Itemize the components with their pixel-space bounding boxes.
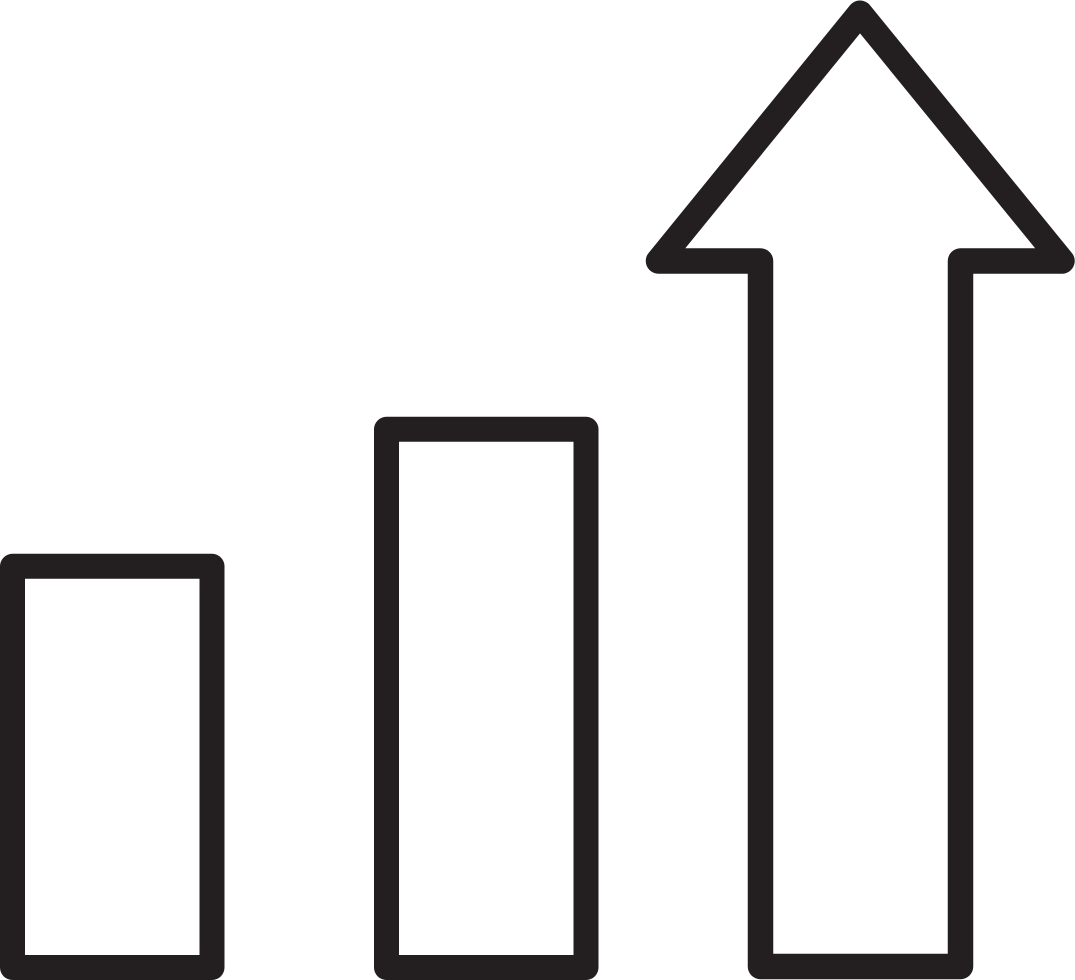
- medium bar: [386, 429, 586, 968]
- tall arrow: [658, 13, 1062, 966]
- short bar: [12, 566, 212, 968]
